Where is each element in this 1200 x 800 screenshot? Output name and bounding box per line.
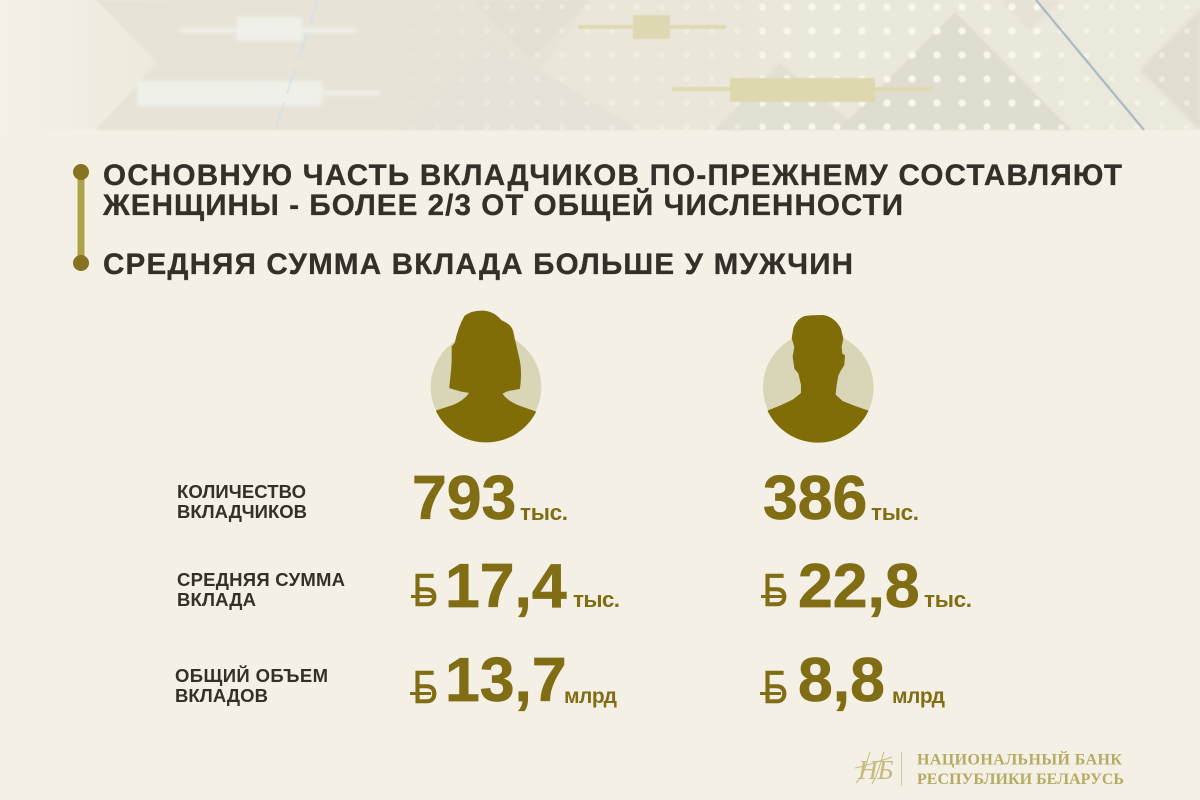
row label: number of depositors: КОЛИЧЕСТВО	[177, 481, 306, 502]
value: women average deposit: Б	[412, 565, 438, 617]
heading: main message: ЖЕНЩИНЫ - БОЛЕЕ 2/3 ОТ ОБЩЕЙ ЧИСЛЕННОСТИ	[102, 188, 903, 222]
heading: main message: СРЕДНЯЯ СУММА ВКЛАДА БОЛЬШЕ У МУЖЧИН	[103, 248, 853, 281]
footer logo: National Bank of Belarus: НАЦИОНАЛЬНЫЙ БАНК	[917, 750, 1122, 768]
heading: main message	[102, 159, 1122, 281]
value: men depositors: тыс.	[871, 500, 919, 525]
value: men average deposit: 22,8	[798, 551, 920, 621]
footer logo: National Bank of Belarus: РЕСПУБЛИКИ БЕЛАРУСЬ	[917, 771, 1124, 788]
value: women depositors: 793	[412, 463, 516, 533]
value: women depositors: тыс.	[520, 500, 568, 525]
icon: monogram: НБ	[857, 755, 893, 785]
row label: number of depositors	[177, 481, 307, 522]
value: women total volume: Б	[412, 662, 438, 714]
row label: average deposit: СРЕДНЯЯ СУММА	[177, 569, 345, 590]
bullet connector	[73, 164, 89, 271]
heading: main message: ОСНОВНУЮ ЧАСТЬ ВКЛАДЧИКОВ ПО-ПРЕЖНЕМУ СОСТАВЛЯЮТ	[103, 159, 1122, 192]
row label: total volume	[175, 665, 328, 706]
row label: total volume: ВКЛАДОВ	[175, 685, 268, 706]
value: men average deposit	[761, 551, 972, 621]
value: men total volume: Б	[762, 662, 788, 714]
value: men depositors: 386	[763, 463, 867, 533]
row label: average deposit	[177, 569, 345, 610]
value: women depositors	[412, 463, 568, 533]
value: men total volume	[760, 645, 945, 715]
value: men average deposit: Б	[762, 565, 788, 617]
value: women total volume: 13,7	[445, 645, 567, 715]
icon: man silhouette	[763, 316, 874, 443]
value: men total volume: млрд	[892, 685, 945, 708]
value: men average deposit: тыс.	[924, 587, 972, 612]
footer logo: National Bank of Belarus	[855, 750, 1124, 788]
icon: woman silhouette	[431, 311, 541, 442]
header decorative banner	[0, 0, 1200, 130]
value: women total volume: млрд	[564, 685, 617, 708]
value: women average deposit	[411, 551, 620, 621]
row label: average deposit: ВКЛАДА	[177, 589, 256, 610]
value: women average deposit: тыс.	[573, 587, 620, 612]
value: women total volume	[410, 645, 617, 715]
value: men depositors	[763, 463, 919, 533]
row label: number of depositors: ВКЛАДЧИКОВ	[177, 501, 307, 522]
value: women average deposit: 17,4	[445, 551, 567, 621]
row label: total volume: ОБЩИЙ ОБЪЕМ	[175, 665, 328, 686]
value: men total volume: 8,8	[798, 645, 885, 715]
